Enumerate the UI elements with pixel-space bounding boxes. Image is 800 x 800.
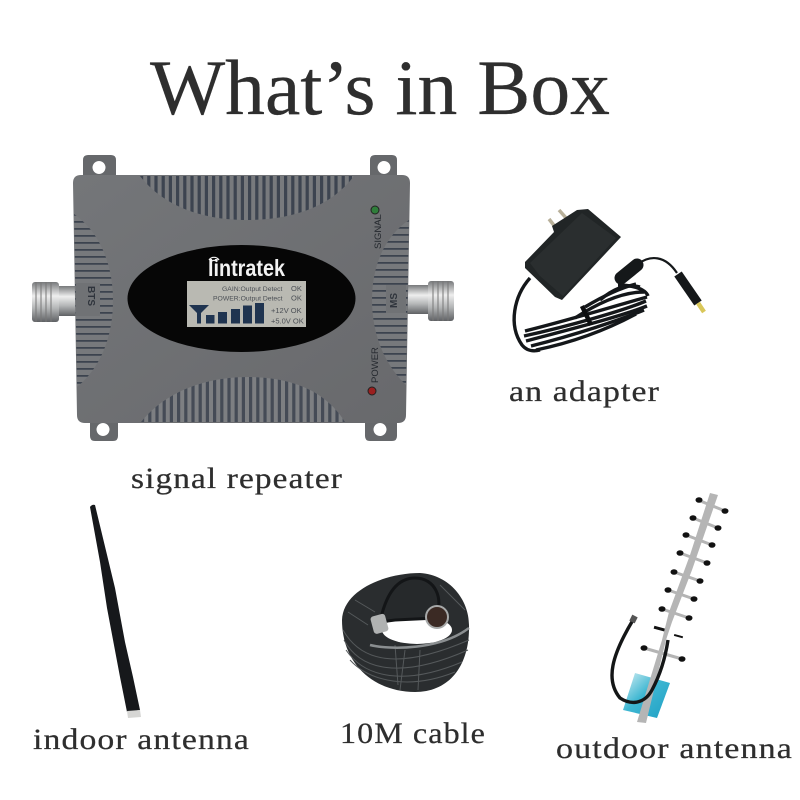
signal strength bars	[189, 303, 264, 324]
power LED and label: POWER	[370, 347, 381, 383]
cable strap	[582, 306, 591, 325]
LCD display: +12V OK	[271, 306, 302, 315]
signal LED and label: SIGNAL	[373, 214, 384, 249]
mounting tabs	[83, 155, 397, 441]
power LED and label	[368, 347, 381, 395]
top cooling fins	[140, 176, 354, 220]
barrel plug	[678, 274, 704, 312]
power adapter	[514, 209, 704, 351]
signal LED and label	[371, 206, 384, 249]
cable label: 10M cable	[340, 717, 486, 750]
adapter cable coil	[514, 278, 648, 351]
coil highlight	[370, 628, 469, 648]
BTS port label	[76, 283, 100, 316]
signal repeater device	[32, 155, 454, 441]
pigtail cable	[612, 620, 668, 702]
mounting bracket	[623, 673, 670, 718]
barrel plug wire	[638, 258, 677, 273]
N-type female connector	[426, 606, 448, 628]
LCD display: POWER:Output Detect	[213, 296, 283, 302]
right cooling fins	[372, 220, 409, 384]
coil side bands	[343, 585, 469, 690]
pigtail connector	[632, 616, 635, 622]
outdoor yagi antenna	[612, 493, 728, 723]
LCD display: GAIN:Output Detect	[222, 286, 283, 293]
antenna elements	[644, 500, 725, 659]
LCD display: OK	[291, 294, 302, 302]
inner cable	[380, 578, 439, 622]
adapter prongs	[549, 210, 567, 228]
left cooling fins	[74, 214, 113, 386]
boom	[637, 493, 718, 723]
LCD display: OK	[291, 284, 302, 293]
ferrite bead	[621, 265, 637, 278]
right connector	[405, 281, 454, 321]
left connector	[32, 282, 78, 322]
MS port label	[386, 285, 406, 313]
BTS port label: BTS	[85, 286, 96, 306]
title: What’s in Box	[150, 44, 610, 131]
indoor antenna	[90, 505, 141, 718]
signal repeater label: signal repeater	[131, 462, 343, 495]
device body	[73, 175, 410, 423]
adapter body	[525, 209, 621, 300]
bottom cooling fins	[141, 377, 345, 422]
LCD display	[187, 281, 306, 327]
N-type male connector	[370, 613, 389, 635]
coil outer shape	[342, 573, 469, 692]
Lintratek logo: lintratek	[208, 255, 285, 281]
antenna base tip	[127, 710, 141, 718]
indoor antenna label: indoor antenna	[33, 723, 250, 756]
MS port label: MS	[389, 293, 400, 308]
LCD display: +5.0V OK	[271, 316, 304, 326]
coiled cable	[342, 573, 469, 692]
coil centre hole	[382, 616, 452, 644]
element end caps	[640, 497, 728, 662]
outdoor antenna label: outdoor antenna	[556, 732, 793, 765]
black oval panel	[128, 245, 356, 352]
adapter label: an adapter	[509, 375, 660, 408]
